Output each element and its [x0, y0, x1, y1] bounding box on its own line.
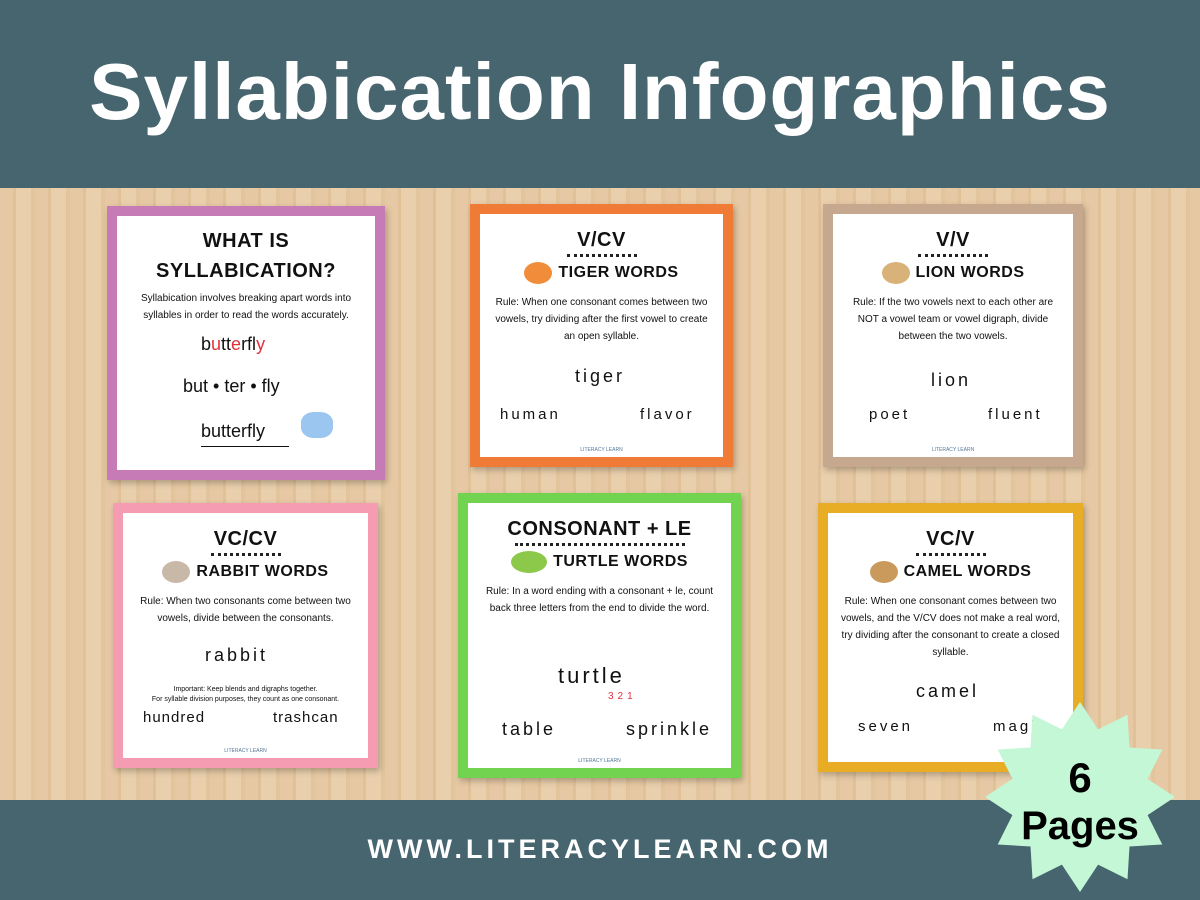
card: VC/CV rabbit: For syllable division purposes, they count as one consonant. [152, 696, 339, 703]
card: V/CV tiger: tiger [575, 366, 625, 386]
card: VC/V camel: Rule: When one consonant comes between two vowels, and the V/CV does not make a real word, try dividing after the consonant to create a closed syllable. [841, 596, 1060, 658]
heading: lion words [882, 262, 1024, 284]
badge: 6 pages starburst: 6 [1068, 754, 1092, 801]
card: consonant + le turtle: sprinkle [626, 719, 712, 739]
card: V/CV tiger: human [500, 406, 561, 423]
card: what is syllabication: but • ter • fly [183, 376, 280, 396]
card: consonant + le turtle [458, 493, 741, 778]
card: V/V lion [823, 204, 1083, 467]
card: VC/CV rabbit: rabbit [205, 645, 268, 665]
footer [0, 800, 1200, 900]
heading: turtle words: TURTLE WORDS [553, 553, 688, 570]
card: V/V lion: fluent [988, 406, 1043, 423]
card: consonant + le turtle: LITERACY LEARN [578, 758, 621, 764]
card: VC/V camel: magic [993, 718, 1048, 735]
icon: butterfly [301, 412, 333, 438]
card: VC/V camel: seven [858, 718, 913, 735]
wood background [0, 188, 1200, 800]
card: what is syllabication: SYLLABICATION? [156, 260, 336, 282]
card: VC/V camel: VC/V [926, 528, 975, 550]
card: V/CV tiger: V/CV [577, 229, 626, 251]
card: VC/V camel [818, 503, 1083, 772]
heading: lion words: LION WORDS [916, 264, 1024, 281]
card: VC/CV rabbit: hundred [143, 709, 205, 726]
card: what is syllabication: Syllabication involves breaking apart words into syllables in order to read the words accurately. [141, 293, 351, 321]
card: consonant + le turtle: 321 [608, 691, 637, 702]
card: VC/CV rabbit: LITERACY LEARN [224, 748, 267, 754]
card: consonant + le turtle: table [502, 719, 556, 739]
card: what is syllabication: butterfly [201, 421, 265, 441]
heading: turtle words [511, 551, 688, 573]
card: consonant + le turtle: CONSONANT + LE [507, 518, 692, 540]
header [0, 0, 1200, 188]
card: V/V lion: poet [869, 406, 910, 423]
heading: rabbit words [162, 561, 329, 583]
card: VC/CV rabbit: Rule: When two consonants come between two vowels, divide between the consonants. [140, 596, 351, 624]
card: consonant + le turtle: Rule: In a word ending with a consonant + le, count back three letters from the end to divide the word. [486, 586, 713, 614]
card: VC/V camel: camel [916, 681, 979, 701]
card: VC/CV rabbit: trashcan [273, 709, 339, 726]
card: V/CV tiger: flavor [640, 406, 695, 423]
card: what is syllabication [107, 206, 385, 480]
card: V/CV tiger: Rule: When one consonant comes between two vowels, try dividing after the first vowel to create an open syllable. [495, 297, 708, 342]
card: V/CV tiger: LITERACY LEARN [580, 447, 623, 453]
badge: 6 pages starburst [985, 702, 1175, 892]
card: VC/CV rabbit [113, 503, 378, 768]
heading: camel words: CAMEL WORDS [904, 563, 1031, 580]
card: VC/CV rabbit: VC/CV [214, 528, 277, 550]
heading: camel words [870, 561, 1031, 583]
card: V/CV tiger [470, 204, 733, 467]
card: what is syllabication: butterfly [201, 334, 265, 354]
website url: WWW.LITERACYLEARN.COM [368, 834, 832, 864]
heading: rabbit words: RABBIT WORDS [196, 563, 329, 580]
card: VC/CV rabbit: Important: Keep blends and digraphs together. [174, 686, 318, 693]
card: V/V lion: Rule: If the two vowels next to each other are NOT a vowel team or vowel digraph, divide between the two vowels. [853, 297, 1053, 342]
card: consonant + le turtle: turtle [558, 663, 625, 688]
title: Syllabication Infographics [89, 47, 1111, 136]
badge: 6 pages starburst: Pages [1021, 804, 1139, 848]
card: V/V lion: lion [931, 370, 971, 390]
card: V/V lion: V/V [936, 229, 970, 251]
card: V/V lion: LITERACY LEARN [932, 447, 974, 453]
heading: tiger words: TIGER WORDS [558, 264, 679, 281]
heading: tiger words [524, 262, 679, 284]
card: what is syllabication: WHAT IS [203, 230, 289, 252]
